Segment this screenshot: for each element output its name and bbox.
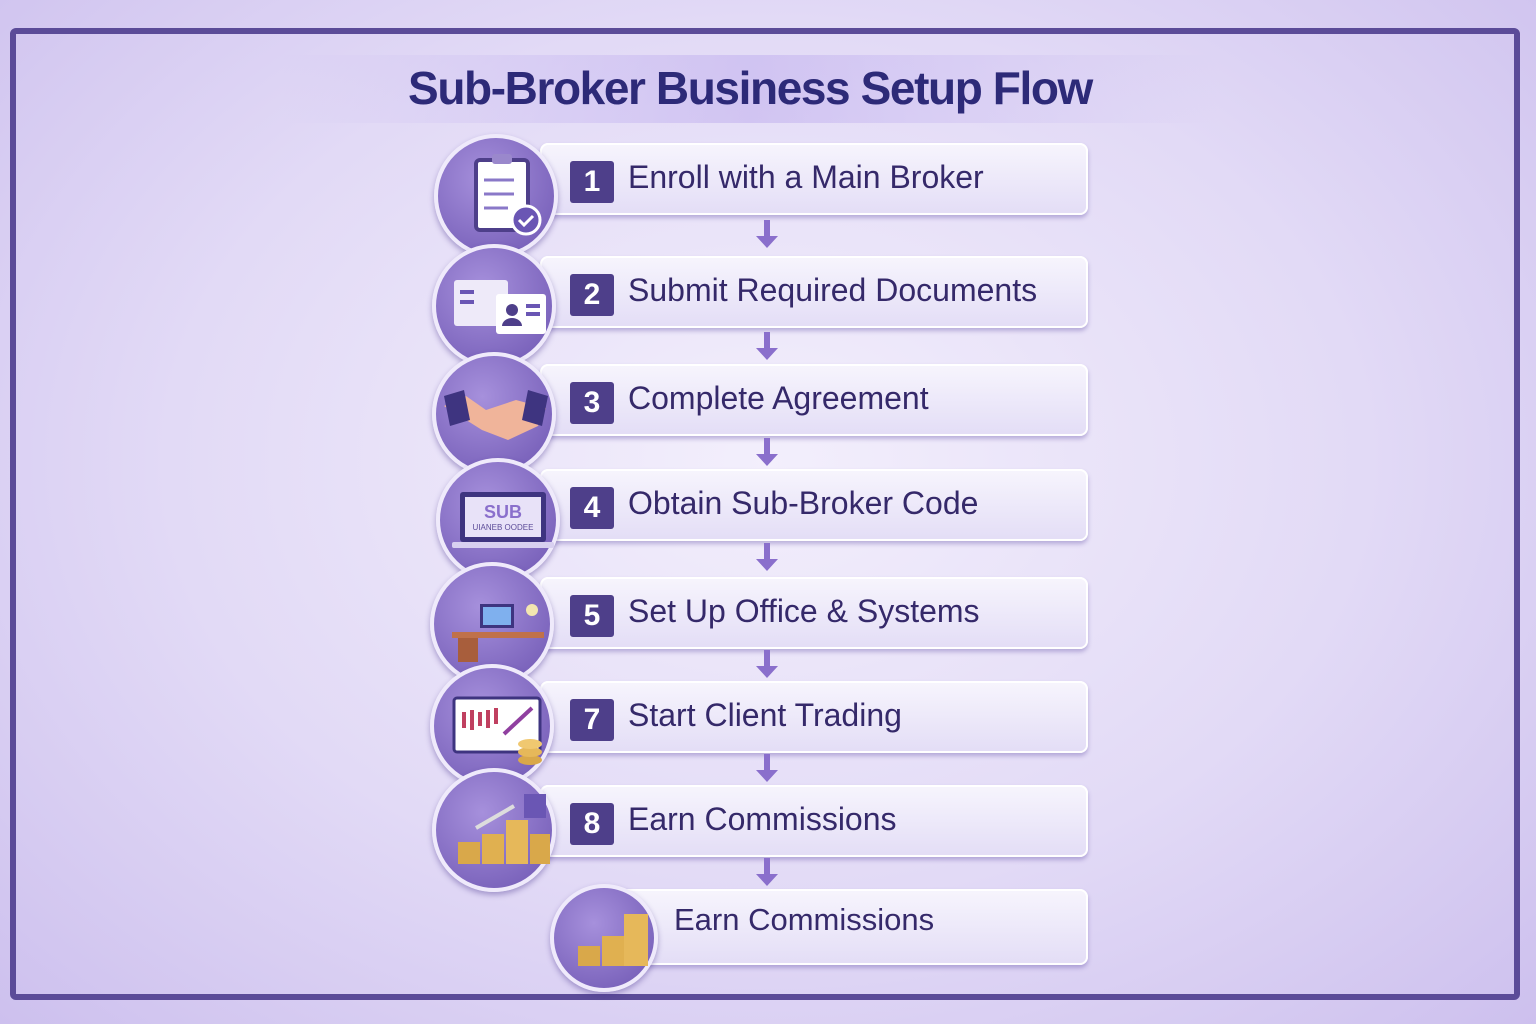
step 7: 7: [584, 703, 600, 736]
icon: laptop SUB: SUB: [484, 502, 522, 522]
icon: clipboard: [434, 134, 558, 258]
step 3: 3: [584, 386, 600, 419]
step 1: 1: [584, 165, 600, 198]
final step: [600, 889, 1088, 965]
icon: handshake: [432, 352, 556, 476]
step 5: Set Up Office & Systems: [628, 593, 980, 629]
final step: Earn Commissions: [674, 902, 934, 937]
arrow: [756, 543, 778, 571]
step 5: 5: [584, 599, 600, 632]
step 4: 4: [584, 491, 600, 524]
step 8: [540, 785, 1088, 857]
icon: documents: [432, 244, 556, 368]
arrow: [756, 650, 778, 678]
step 8: 8: [584, 807, 600, 840]
step 2: 2: [584, 278, 600, 311]
step 2: [540, 256, 1088, 328]
icon: laptop SUB: UIANEB OODEE: [473, 523, 533, 532]
step 7: Start Client Trading: [628, 697, 902, 733]
arrow: [756, 220, 778, 248]
step 1: Enroll with a Main Broker: [628, 159, 984, 195]
icon: coins: [432, 768, 556, 892]
icon: laptop SUB: [436, 458, 560, 582]
title: [282, 55, 1218, 123]
arrow: [756, 438, 778, 466]
step 2: Submit Required Documents: [628, 272, 1037, 308]
step 3: [540, 364, 1088, 436]
arrow: [756, 858, 778, 886]
icon: office desk: [430, 562, 554, 686]
step 7: [540, 681, 1088, 753]
step 3: Complete Agreement: [628, 380, 929, 416]
arrow: [756, 754, 778, 782]
arrow: [756, 332, 778, 360]
step 5: [540, 577, 1088, 649]
icon: coins final: [550, 884, 658, 992]
step 4: Obtain Sub-Broker Code: [628, 485, 978, 521]
title: Sub-Broker Business Setup Flow: [408, 62, 1092, 114]
step 4: [540, 469, 1088, 541]
icon: trading monitor: [430, 664, 554, 788]
step 8: Earn Commissions: [628, 801, 897, 837]
step 1: [540, 143, 1088, 215]
